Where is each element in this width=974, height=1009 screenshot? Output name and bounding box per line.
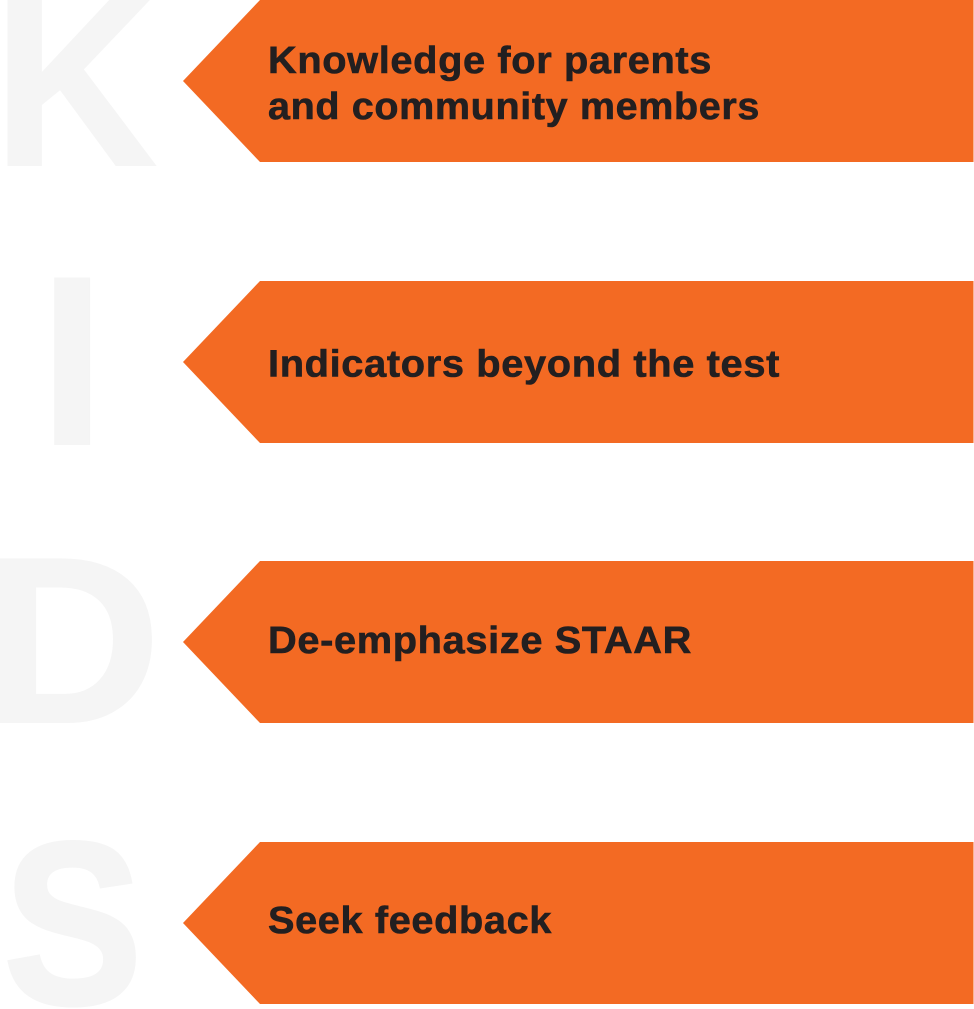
arrow banner: knowledge: and community members (268, 86, 760, 128)
arrow banner: seek feedback (183, 842, 974, 1004)
arrow banner: indicators: Indicators beyond the test (268, 344, 780, 386)
arrow banner: knowledge: Knowledge for parents (268, 40, 712, 82)
arrow banner: seek feedback: Seek feedback (268, 900, 552, 942)
arrow banner: de-emphasize: De-emphasize STAAR (268, 620, 692, 662)
arrow banner: indicators (183, 281, 974, 443)
arrow banner: knowledge (183, 0, 974, 162)
arrow banner: de-emphasize (183, 561, 974, 723)
letter I: I (38, 226, 106, 496)
